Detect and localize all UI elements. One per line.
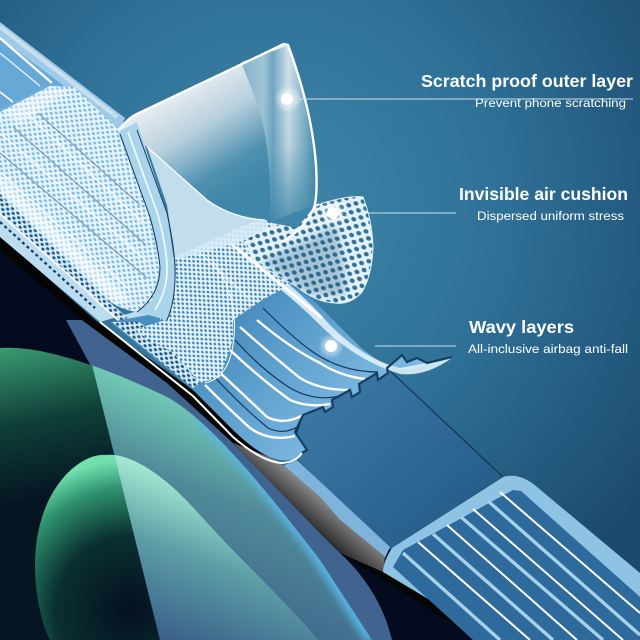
dark mesh band: [0, 194, 128, 320]
cup rim: [118, 44, 317, 242]
large green arc, lit right side: [92, 366, 364, 640]
heading: Wavy layers: [469, 317, 574, 337]
cup right highlight: [241, 47, 315, 222]
clear cup section: [118, 43, 318, 320]
center mesh panel: [160, 203, 323, 320]
large green arc, dark left side: [0, 348, 114, 640]
lower rim lip of case: [0, 212, 175, 333]
wavy white ribs: [205, 320, 365, 438]
lower dotted strip: [0, 222, 95, 308]
front lobe: [133, 261, 233, 383]
black phone frame: [0, 236, 497, 640]
cup glass: [118, 43, 318, 228]
mesh panel: [0, 86, 160, 312]
leader line: [368, 212, 456, 214]
strip white stripes: [418, 492, 640, 640]
diagonal white stripe: [195, 243, 322, 318]
strip inner dark channel: [393, 490, 640, 640]
case white edge lines: [0, 27, 117, 117]
wavy layer body: [110, 243, 452, 460]
left case body with mesh: [0, 22, 175, 333]
light bezel strip: [280, 460, 390, 558]
strip outer body: [383, 476, 640, 640]
inner green arc, dark left side: [35, 454, 160, 640]
marker dot: [323, 203, 343, 223]
mesh layer under the cup: [160, 197, 373, 320]
mesh soft highlights: [0, 175, 132, 302]
marker dot: [277, 88, 299, 110]
blue glass panel: [297, 368, 503, 550]
frame white highlight: [100, 322, 302, 463]
leader line: [298, 98, 633, 100]
caption: Dispersed uniform stress: [477, 209, 624, 223]
lower white line: [0, 214, 132, 332]
caption: All-inclusive airbag anti-fall: [468, 342, 628, 356]
ribbed strip, bottom right: [383, 476, 640, 640]
callout: wavy layers: [321, 317, 628, 356]
phone screen with green wallpaper: [0, 250, 473, 640]
heading: Invisible air cushion: [459, 184, 628, 204]
lower mesh strip: [112, 322, 205, 388]
leader line: [375, 345, 456, 347]
caption: Prevent phone scratching: [475, 96, 626, 110]
J wall edges: [120, 134, 160, 312]
callout: invisible air cushion: [323, 184, 628, 223]
right lobe shading: [262, 225, 345, 295]
wavy layer: [100, 238, 452, 463]
case clear edge: [0, 22, 125, 135]
inner green arc, lit right side: [114, 455, 318, 640]
cup floor gloss: [147, 147, 267, 260]
wavy stepped outline: [295, 355, 452, 453]
white lobe outline: [205, 262, 234, 383]
wavy top gloss: [220, 238, 452, 374]
callout: scratch proof outer layer: [277, 71, 633, 110]
marker dot: [321, 336, 341, 356]
heading: Scratch proof outer layer: [421, 71, 633, 91]
J wall of case: [118, 122, 175, 320]
wavy dark ribs: [210, 308, 378, 431]
frame grey sheen: [233, 443, 385, 572]
big arc bright rim: [200, 418, 372, 640]
strip pale stripes: [403, 501, 640, 640]
right mesh lobe: [243, 197, 373, 303]
blue bezel: [66, 320, 392, 640]
dark phone body: [0, 236, 510, 640]
mesh white lines: [0, 112, 148, 290]
drooping mesh lobes: [133, 261, 234, 383]
mesh grey lines: [0, 113, 147, 278]
